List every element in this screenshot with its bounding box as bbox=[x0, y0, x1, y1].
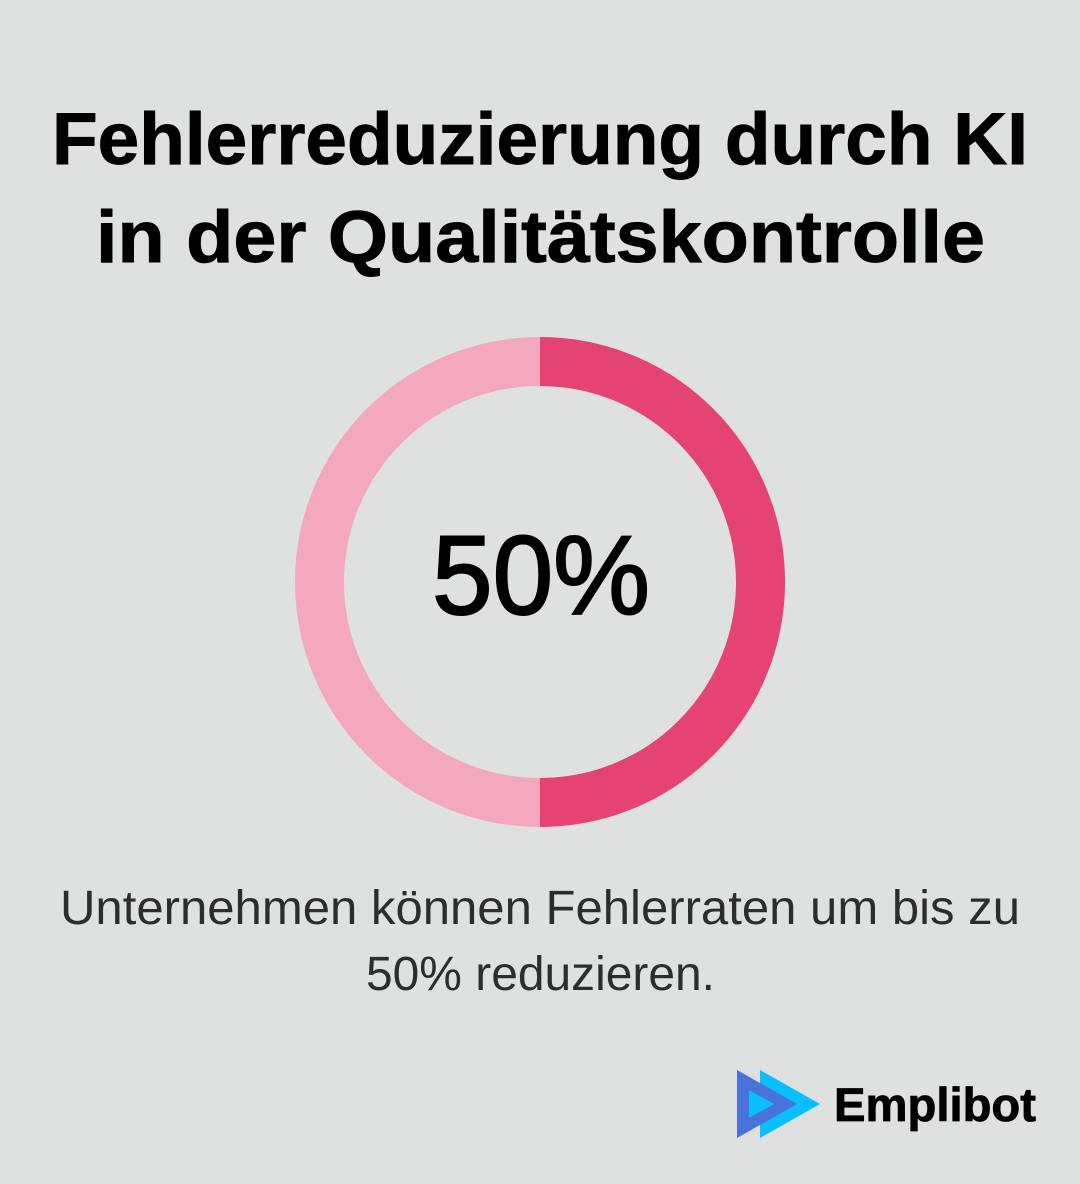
title: Fehlerreduzierung durch KI bbox=[52, 99, 1028, 180]
donut chart: 50% bbox=[320, 362, 760, 802]
logo wordmark: Emplibot bbox=[834, 1078, 1036, 1131]
description text bbox=[60, 882, 1020, 1001]
title bbox=[52, 99, 1028, 278]
icon: play triangles bbox=[737, 1070, 820, 1138]
description text: Unternehmen können Fehlerraten um bis zu bbox=[60, 882, 1020, 935]
title: in der Qualitätskontrolle bbox=[96, 197, 985, 278]
center value: 50% bbox=[432, 513, 650, 638]
logo: Emplibot bbox=[737, 1070, 1036, 1138]
description text: 50% reduzieren. bbox=[366, 948, 715, 1001]
